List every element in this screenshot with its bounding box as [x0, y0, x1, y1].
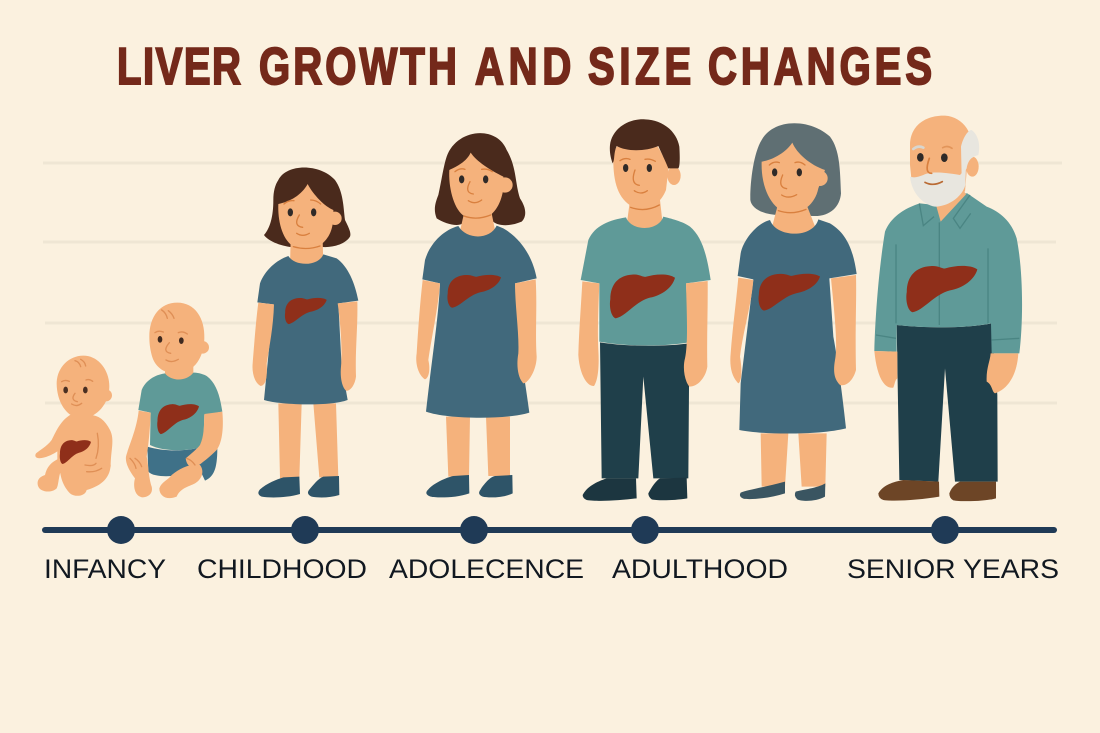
liver: toddler: [157, 404, 199, 434]
stage labels: CHILDHOOD: [197, 554, 367, 584]
figure: infant: [35, 356, 112, 496]
timeline: [42, 516, 1057, 544]
title: CHANGES: [708, 37, 932, 95]
title: [117, 37, 932, 95]
title: GROWTH: [259, 37, 457, 95]
stage labels: SENIOR YEARS: [847, 554, 1059, 584]
stage labels: ADULTHOOD: [612, 554, 788, 584]
stage labels: [44, 554, 1059, 584]
figure: adult man: [578, 119, 711, 501]
figure: adult woman: [730, 123, 857, 501]
liver: infant: [60, 440, 91, 464]
liver: adult man: [610, 274, 675, 318]
figure: child: [252, 167, 358, 498]
figure: teen: [416, 133, 537, 497]
title: SIZE: [588, 37, 691, 95]
figure: senior: [874, 116, 1022, 501]
liver: child: [285, 298, 327, 324]
stage labels: INFANCY: [44, 554, 166, 584]
liver: teen: [447, 275, 501, 308]
liver: adult woman: [759, 274, 820, 311]
liver: senior: [906, 266, 977, 312]
title: AND: [475, 37, 571, 95]
title: LIVER: [117, 37, 241, 95]
figure: toddler: [126, 303, 223, 498]
stage labels: ADOLECENCE: [389, 554, 584, 584]
